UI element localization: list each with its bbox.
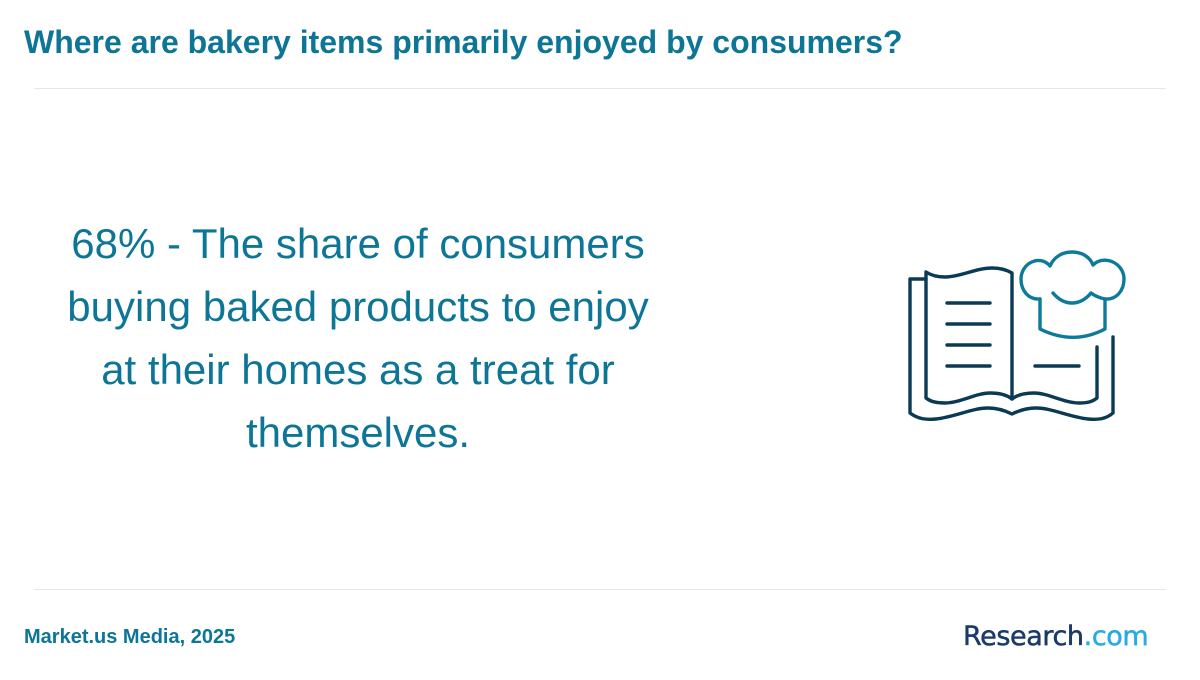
main statistic text: at their homes as a treat for xyxy=(101,346,615,393)
title: Where are bakery items primarily enjoyed by consumers? xyxy=(24,24,903,60)
main statistic text xyxy=(67,220,649,456)
icon: chef hat xyxy=(1021,252,1124,337)
main statistic text: 68% - The share of consumers xyxy=(71,220,645,267)
icon: open book xyxy=(910,268,1113,419)
source label: Market.us Media, 2025 xyxy=(24,626,235,648)
main statistic text: buying baked products to enjoy xyxy=(67,283,649,330)
main statistic text: themselves. xyxy=(246,409,470,456)
logo: Research.com: Research.com xyxy=(963,621,1148,652)
